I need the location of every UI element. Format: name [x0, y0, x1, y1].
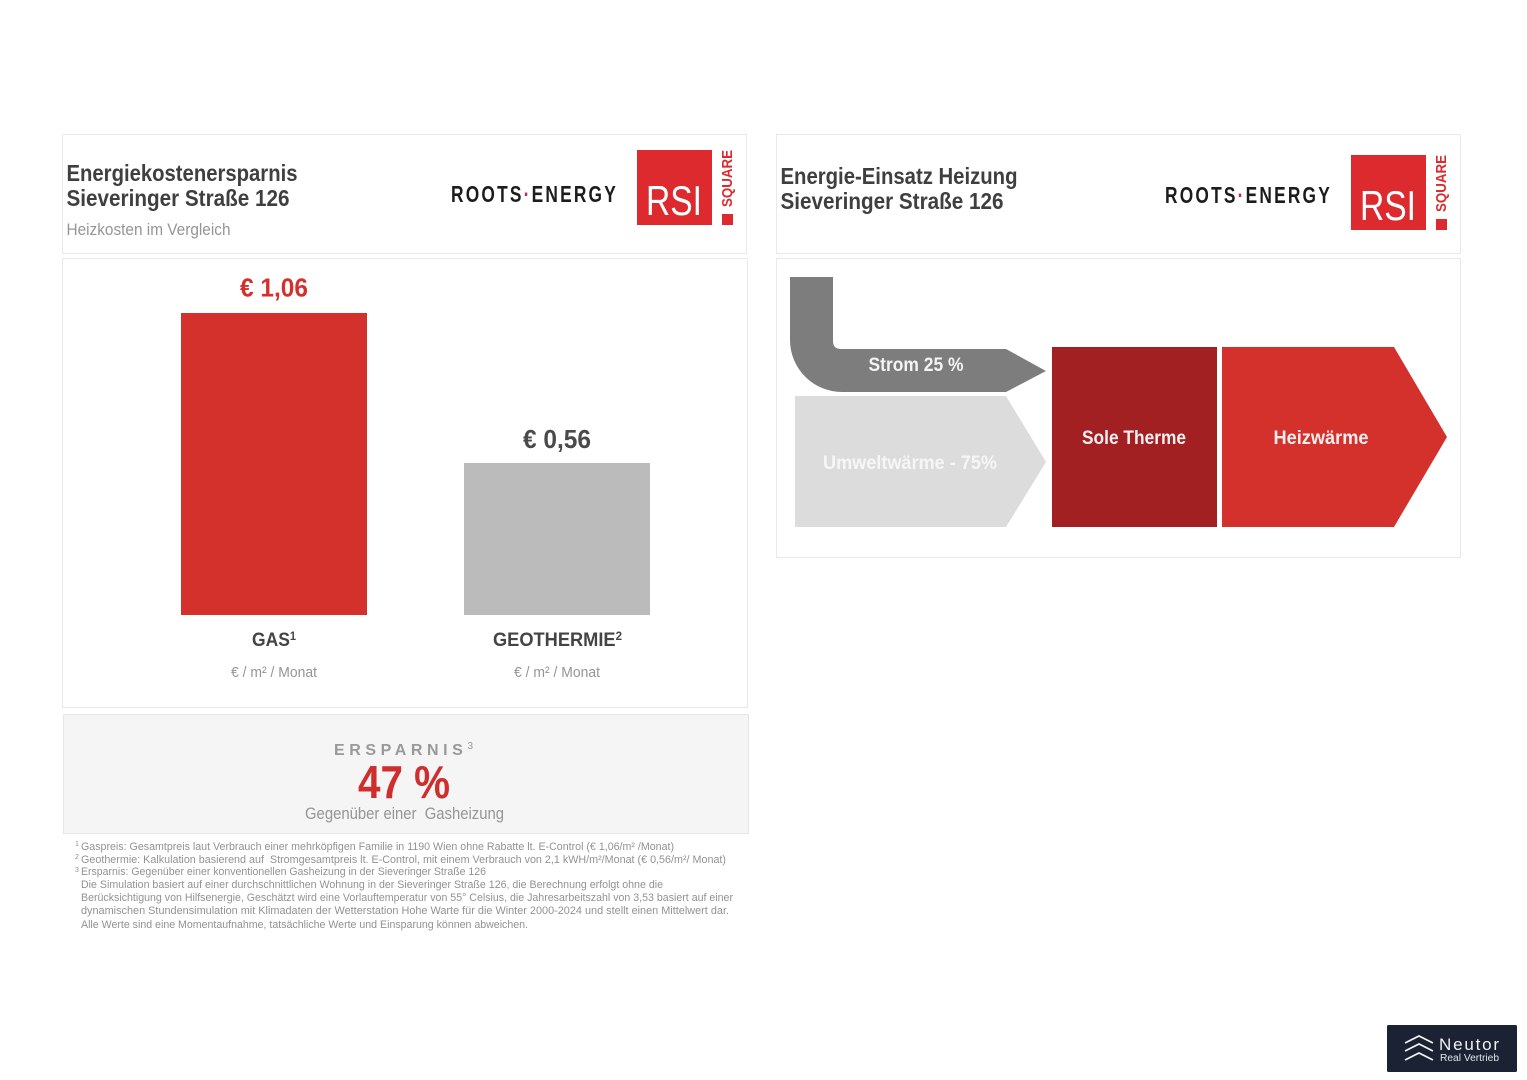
arrow: electricity 25 percent: Strom 25 % — [868, 355, 964, 376]
bar: gas: € 1,06 — [240, 272, 308, 302]
logo: RSI Square: SQUARE — [1434, 155, 1450, 212]
panel: cost savings header — [62, 134, 746, 254]
heading: cost savings: Sieveringer Straße 126 — [66, 185, 290, 211]
heading: energy use: Energie-Einsatz Heizung — [780, 163, 1018, 189]
panel: energy use header — [776, 134, 1460, 254]
savings label: 3 — [467, 741, 473, 752]
logo: Roots Energy: ROOTS·ENERGY — [1165, 182, 1332, 208]
panel: bar chart — [62, 258, 748, 708]
panel: savings — [64, 714, 748, 834]
footnotes — [75, 841, 733, 931]
footnotes: Berücksichtigung von Hilfsenergie, Geschätzt wird eine Vorlauftemperatur von 55° Celsius, die Jahresarbeitszahl von 3,53 basiert auf einer — [81, 892, 733, 904]
bar: geothermal: € / m² / Monat — [514, 664, 601, 681]
arrow: ambient heat 75 percent — [795, 396, 1046, 527]
footnotes: 2 — [75, 854, 79, 861]
box: brine heat pump — [1052, 347, 1217, 527]
logo: RSI Square: RSI — [646, 177, 702, 224]
logo: RSI Square — [1351, 155, 1450, 230]
bar: gas — [181, 272, 367, 681]
bar: geothermal: € 0,56 — [523, 424, 591, 454]
savings note: Gegenüber einer Gasheizung — [305, 804, 504, 823]
footnotes: Geothermie: Kalkulation basierend auf Stromgesamtpreis lt. E-Control, mit einem Verbrauch von 2,1 kWH/m²/Monat (€ 0,56/m²/ Monat) — [81, 854, 726, 866]
heading: cost savings — [66, 160, 298, 211]
badge: Neutor Real Vertrieb: Neutor — [1439, 1035, 1499, 1054]
bar: gas: € / m² / Monat — [231, 664, 318, 681]
arrow: heating output — [1222, 347, 1447, 527]
arrow: electricity 25 percent — [790, 277, 1046, 392]
footnotes: Ersparnis: Gegenüber einer konventionellen Gasheizung in der Sieveringer Straße 126 — [81, 866, 486, 878]
footnotes: 1 — [75, 841, 79, 848]
badge: Neutor Real Vertrieb — [1387, 1025, 1517, 1072]
footnotes: Alle Werte sind eine Momentaufnahme, tatsächliche Werte und Einsparung können abweichen. — [81, 919, 528, 931]
arrow: ambient heat 75 percent: Umweltwärme - 75% — [823, 453, 997, 474]
subheading: Heizkosten im Vergleich — [66, 220, 230, 239]
footnotes: 3 — [75, 867, 79, 874]
box: brine heat pump: Sole Therme — [1082, 428, 1186, 449]
logo: RSI Square — [637, 150, 736, 225]
bar: gas: GAS — [252, 630, 293, 651]
savings value: 47 % — [358, 756, 450, 808]
footnotes: Gaspreis: Gesamtpreis laut Verbrauch einer mehrköpfigen Familie in 1190 Wien ohne Rabatte lt. E-Control (€ 1,06/m² /Monat) — [81, 841, 674, 853]
heading: energy use — [780, 163, 1018, 214]
icon: chevrons — [1405, 1036, 1433, 1060]
panel: energy flow diagram — [776, 258, 1460, 558]
logo: RSI Square: RSI — [1360, 182, 1416, 229]
heading: cost savings: Energiekostenersparnis — [66, 160, 298, 186]
badge: Neutor Real Vertrieb: Real Vertrieb — [1440, 1053, 1499, 1064]
heading: energy use: Sieveringer Straße 126 — [780, 188, 1004, 214]
bar: geothermal: 2 — [616, 629, 622, 643]
savings label: ERSPARNIS — [334, 742, 463, 759]
footnotes: Die Simulation basiert auf einer durchschnittlichen Wohnung in der Sieveringer Straße 126, die Berechnung erfolgt ohne die — [81, 879, 663, 891]
logo: RSI Square: SQUARE — [720, 150, 736, 207]
bar: geothermal — [464, 424, 650, 681]
bar: geothermal: GEOTHERMIE — [493, 630, 621, 651]
footnotes: dynamischen Stundensimulation mit Klimadaten der Wetterstation Hohe Warte für die Winter 2000-2024 und stellt einen Mittelwert dar. — [81, 905, 729, 917]
arrow: heating output: Heizwärme — [1274, 428, 1368, 449]
bar: gas: 1 — [290, 629, 296, 643]
logo: Roots Energy: ROOTS·ENERGY — [451, 181, 618, 207]
